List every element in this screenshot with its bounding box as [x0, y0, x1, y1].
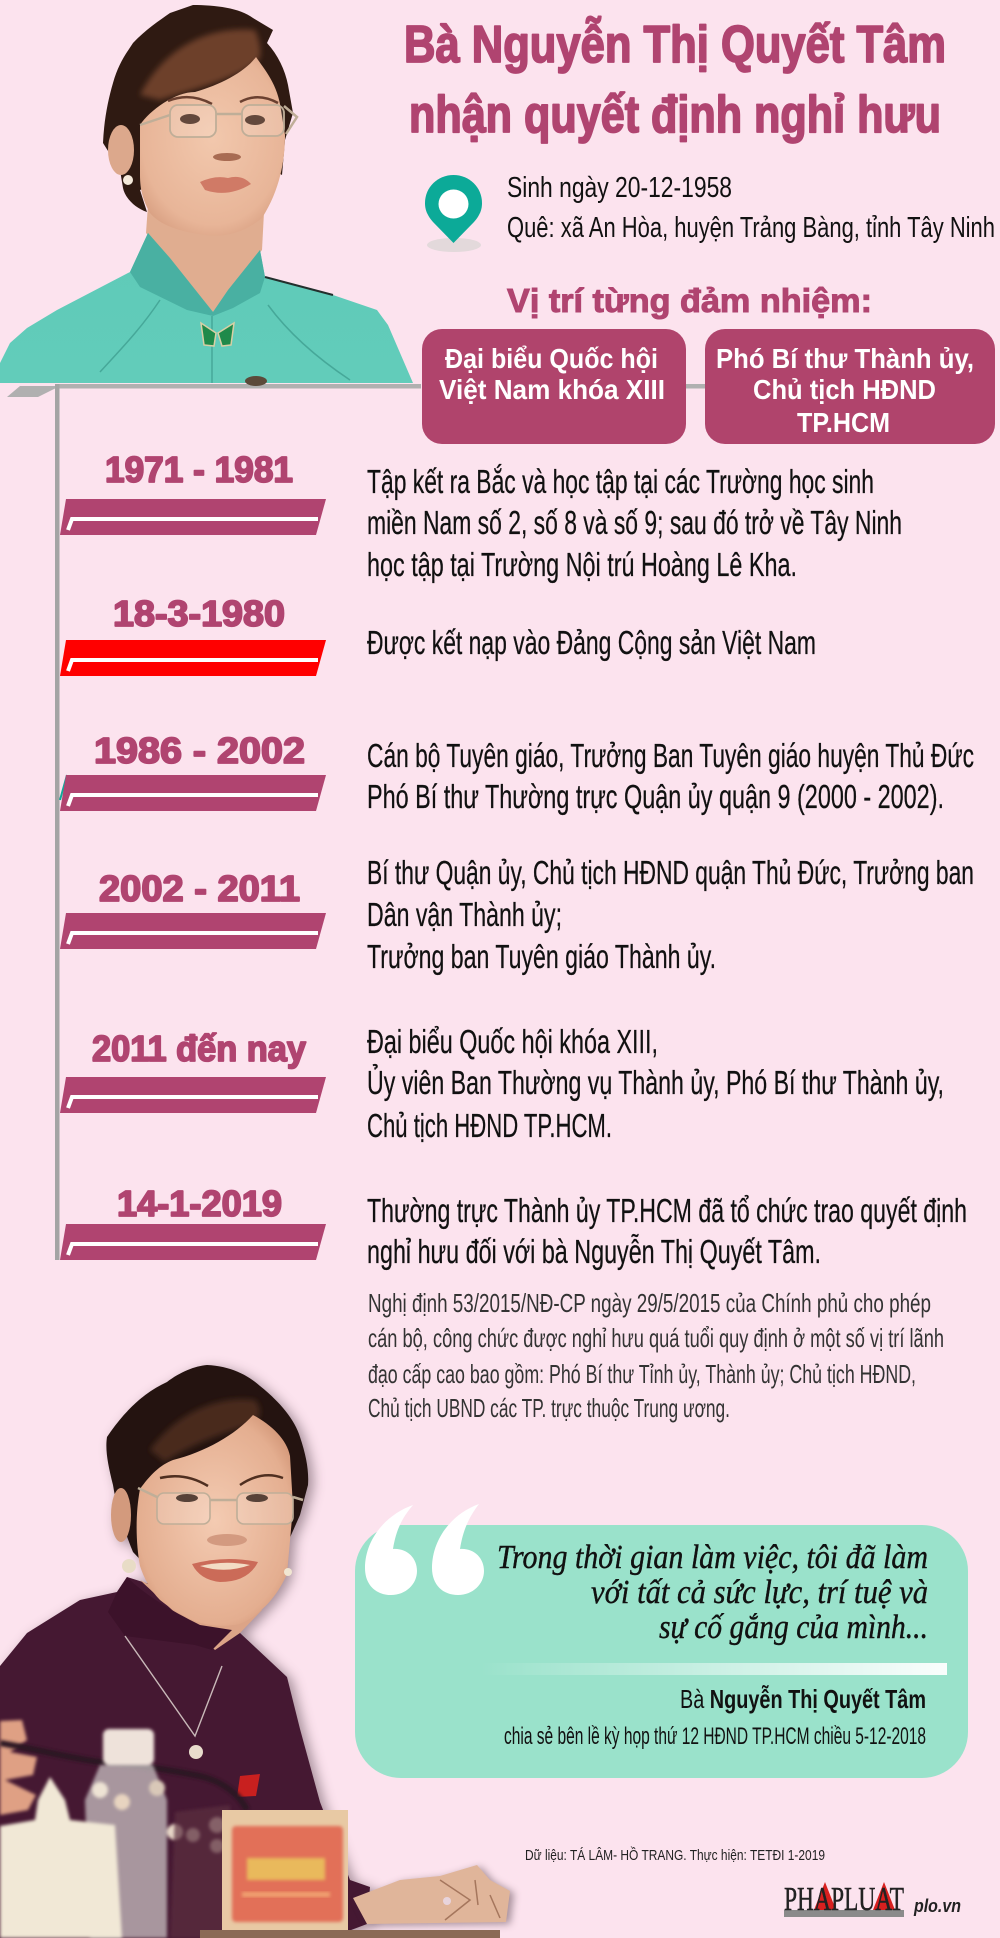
face	[140, 57, 285, 236]
position card 1: Đại biểu Quốc hội	[445, 343, 658, 374]
position card 2: Chủ tịch HĐND	[753, 374, 936, 405]
quote attribution	[504, 1684, 926, 1750]
photo: portrait bottom	[0, 1365, 510, 1938]
timeline item 2002-2011	[60, 854, 974, 975]
microphone stem	[0, 1743, 247, 1810]
ear	[108, 125, 134, 175]
timeline item 14-1-2019: nghỉ hưu đối với bà Nguyễn Thị Quyết Tâm.	[367, 1233, 821, 1270]
brooch	[201, 323, 234, 346]
cup	[0, 1777, 122, 1938]
timeline item 2011 den nay: 2011 đến nay	[92, 1028, 306, 1069]
timeline item 1986-2002	[60, 730, 974, 815]
photo: portrait top	[0, 5, 413, 386]
neck	[146, 205, 264, 312]
timeline item 1971-1981: 1971 - 1981	[105, 449, 293, 490]
collar	[108, 1577, 232, 1650]
dress	[0, 233, 413, 383]
lower garment detail	[245, 376, 267, 386]
decree note: Chủ tịch UBND các TP. trực thuộc Trung ương.	[368, 1393, 730, 1423]
position card 1	[422, 329, 686, 444]
timeline item 1986-2002: 1986 - 2002	[94, 730, 305, 771]
water glass	[170, 1805, 230, 1938]
face	[137, 1415, 293, 1626]
right hands	[353, 1865, 510, 1924]
timeline item 2011 den nay: Đại biểu Quốc hội khóa XIII,	[367, 1023, 658, 1060]
quote text: với tất cả sức lực, trí tuệ và	[591, 1574, 928, 1611]
icon: location pin	[425, 175, 482, 252]
position card 2: Phó Bí thư Thành ủy,	[716, 343, 974, 374]
timeline item 1971-1981: học tập tại Trường Nội trú Hoàng Lê Kha.	[367, 546, 797, 583]
quote text: Trong thời gian làm việc, tôi đã làm	[497, 1539, 928, 1576]
title	[404, 16, 946, 144]
gradient divider	[480, 1663, 947, 1675]
personal info: Sinh ngày 20-12-1958	[507, 172, 732, 204]
hair	[106, 1365, 308, 1570]
neck shade	[140, 1580, 262, 1650]
mouth	[192, 1559, 258, 1582]
earrings	[122, 1559, 136, 1573]
timeline item 2002-2011: Trưởng ban Tuyên giáo Thành ủy.	[367, 938, 716, 975]
eyebrows and eyes	[168, 97, 278, 104]
timeline item 18-3-1980: Được kết nạp vào Đảng Cộng sản Việt Nam	[367, 624, 816, 661]
ear	[111, 1488, 131, 1542]
hair	[103, 5, 293, 212]
badge	[237, 1774, 260, 1797]
heading: positions: Vị trí từng đảm nhiệm:	[507, 282, 872, 319]
timeline item 14-1-2019: 14-1-2019	[117, 1183, 282, 1224]
position card 2	[705, 329, 995, 444]
quote panel	[355, 1504, 968, 1778]
timeline item 1971-1981	[60, 449, 902, 583]
collar	[130, 233, 265, 316]
glasses	[138, 1488, 303, 1524]
logo: Pháp Luật: PHAPLUAT	[784, 1881, 904, 1918]
timeline item 18-3-1980: 18-3-1980	[113, 593, 285, 634]
timeline item 18-3-1980	[60, 593, 816, 676]
icon: quote marks	[365, 1504, 484, 1595]
decree note	[368, 1288, 944, 1423]
necklace	[125, 1636, 222, 1736]
timeline item 2011 den nay: Chủ tịch HĐND TP.HCM.	[367, 1107, 612, 1144]
personal info	[507, 172, 995, 244]
nose	[213, 153, 241, 161]
bottle	[85, 1729, 225, 1938]
credit line: Dữ liệu: TÁ LÂM- HỒ TRANG. Thực hiện: TETĐI 1-2019	[525, 1846, 825, 1864]
timeline item 2011 den nay	[60, 1023, 944, 1144]
mouth	[200, 177, 251, 193]
nose	[207, 1534, 247, 1546]
left hand	[0, 1720, 37, 1815]
table edge	[200, 1930, 500, 1938]
quote text: sự cố gắng của mình...	[659, 1609, 928, 1646]
timeline item 14-1-2019	[60, 1183, 967, 1270]
timeline item 2002-2011: Dân vận Thành ủy;	[367, 896, 562, 933]
glasses	[140, 105, 297, 137]
dress and head with shadow	[0, 1365, 370, 1938]
dress seams	[265, 277, 333, 295]
timeline connector lines	[7, 384, 705, 1260]
position card 2: TP.HCM	[797, 407, 890, 438]
eyebrows and eyes	[160, 1475, 283, 1486]
name plate	[222, 1810, 348, 1932]
position card 1: Việt Nam khóa XIII	[439, 374, 665, 405]
timeline item 2002-2011: 2002 - 2011	[99, 868, 300, 909]
quote attribution: Bà Nguyễn Thị Quyết Tâm	[680, 1684, 926, 1714]
earring	[123, 175, 133, 185]
quote text	[497, 1539, 928, 1646]
dress	[0, 1577, 370, 1938]
logo: Pháp Luật: plo.vn	[913, 1896, 961, 1916]
